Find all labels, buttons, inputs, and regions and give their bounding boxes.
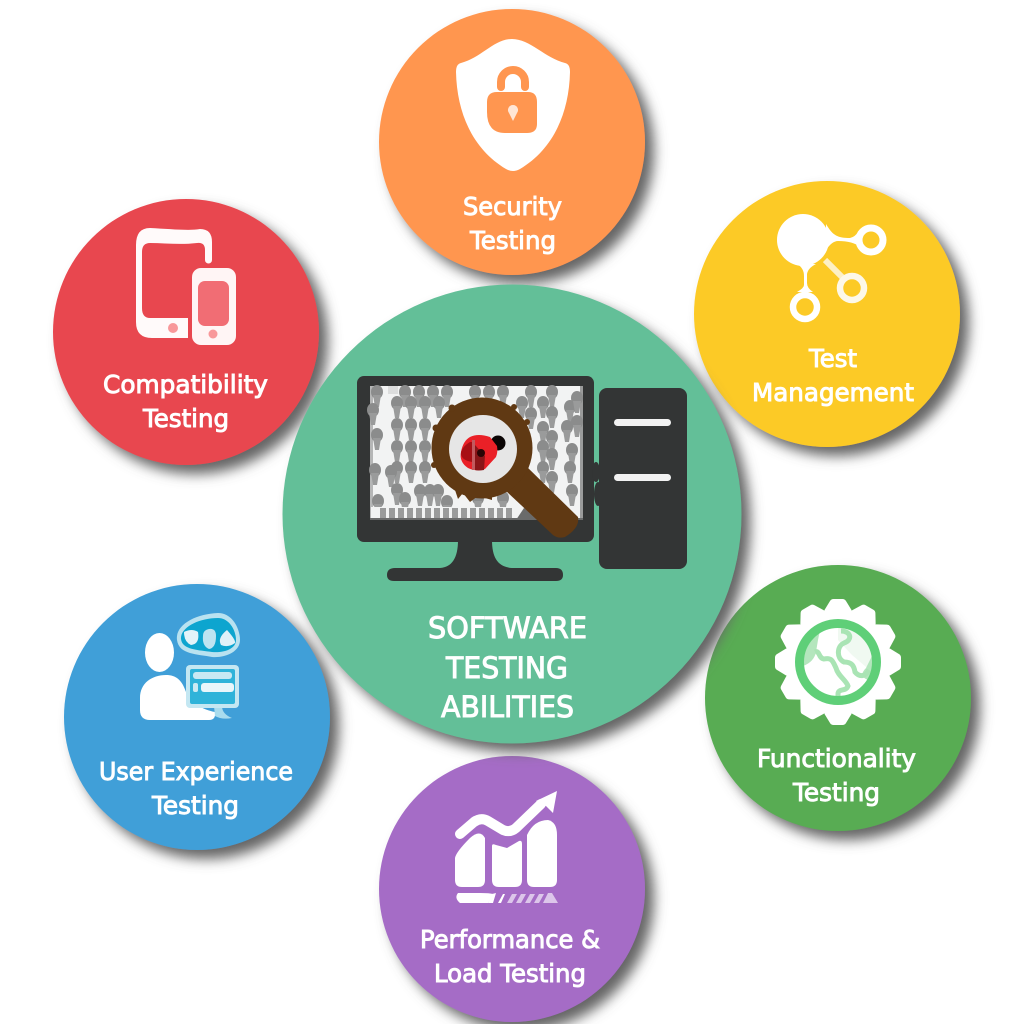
label: functionality testing <box>757 744 916 807</box>
icon: tablet and phone <box>136 228 236 345</box>
label: functionality testing: Functionality <box>757 744 916 773</box>
panel: test management <box>694 181 960 447</box>
label: security testing: Testing <box>469 226 556 255</box>
label: compatibility testing: Compatibility <box>103 370 268 399</box>
magnifying glass <box>431 398 578 538</box>
panel: functionality testing <box>705 565 971 831</box>
panel: central hub <box>282 284 742 744</box>
label: security testing <box>463 192 562 255</box>
icon: rising bar chart <box>455 791 558 903</box>
icon: user with speech bubble and monitor <box>140 613 240 720</box>
icon: desktop computer with magnifier <box>357 376 687 581</box>
label: user experience testing: Testing <box>151 791 239 820</box>
icon: shield with padlock <box>456 39 570 171</box>
panel: performance and load testing <box>379 756 645 1022</box>
title: SOFTWARE <box>428 611 587 645</box>
label: compatibility testing: Testing <box>142 404 229 433</box>
title <box>428 611 587 724</box>
panel: compatibility testing <box>53 199 319 465</box>
label: security testing: Security <box>463 192 562 221</box>
label: performance and load testing <box>420 925 600 988</box>
title: ABILITIES <box>441 690 574 724</box>
label: test management: Management <box>752 378 914 407</box>
panel: security testing <box>379 9 645 275</box>
icon: gear with globe <box>779 603 897 721</box>
title: TESTING <box>445 651 568 685</box>
icon: connected nodes <box>777 214 883 319</box>
screen pattern <box>367 385 583 520</box>
label: test management: Test <box>808 344 857 373</box>
label: test management <box>752 344 914 407</box>
label: performance and load testing: Load Testing <box>434 959 586 988</box>
panel: user experience testing <box>64 584 330 850</box>
monitor <box>357 376 594 581</box>
tower <box>592 388 687 569</box>
label: user experience testing: User Experience <box>99 757 293 786</box>
label: functionality testing: Testing <box>792 778 880 807</box>
label: compatibility testing <box>103 370 268 433</box>
label: performance and load testing: Performance & <box>420 925 600 954</box>
label: user experience testing <box>99 757 293 820</box>
